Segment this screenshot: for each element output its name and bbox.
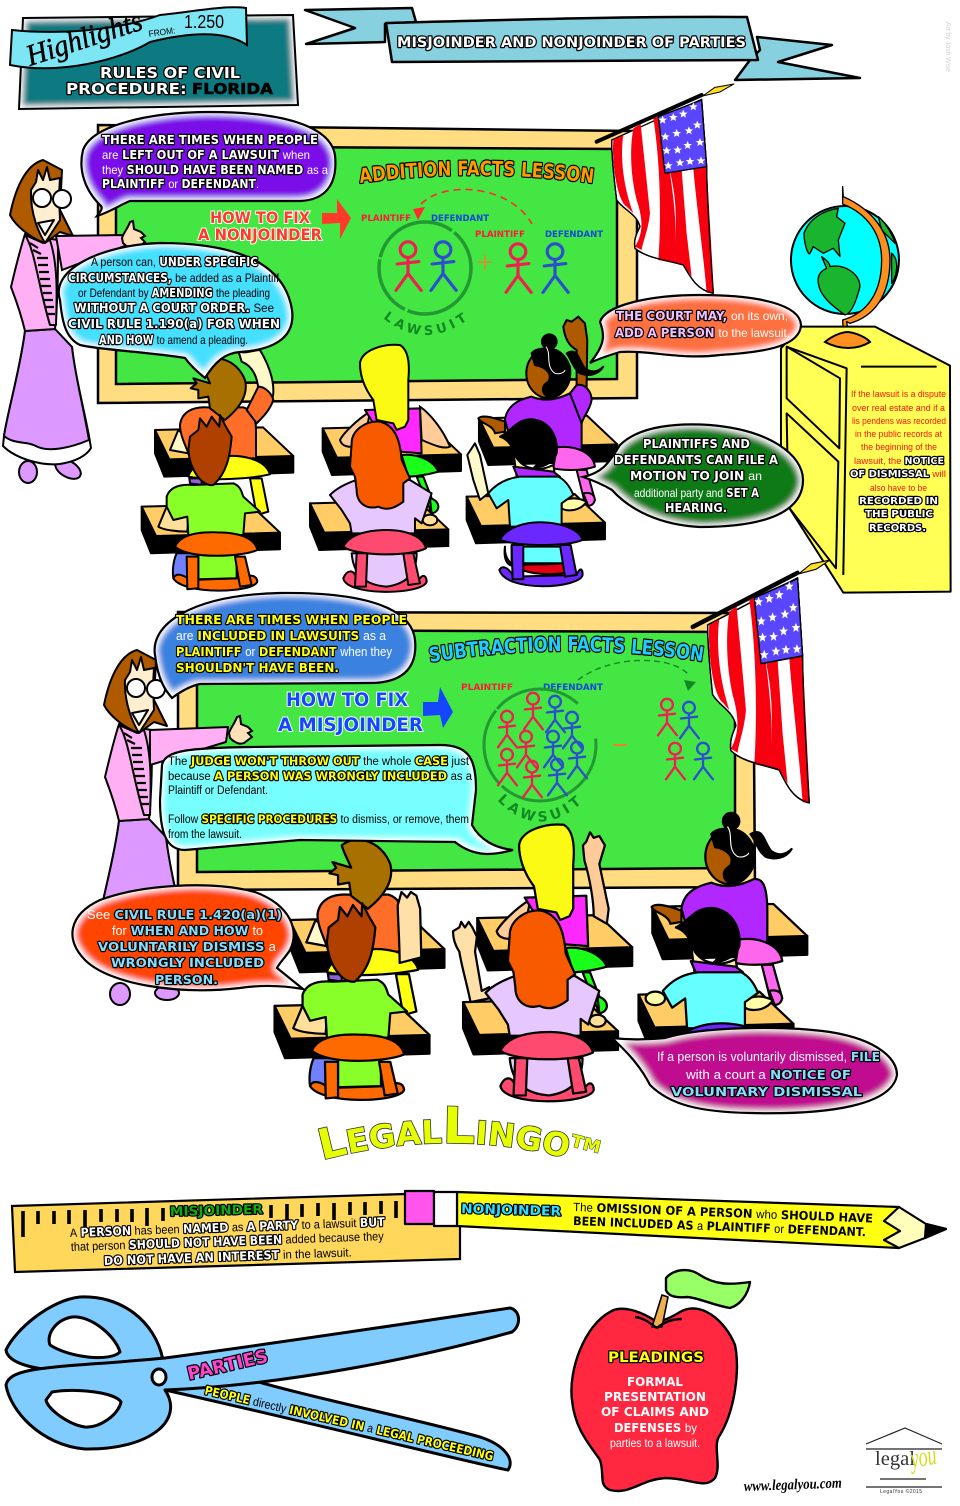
plaintiff defendant addition diagram: PLAINTIFF xyxy=(361,214,411,224)
classroom board: subtraction lesson xyxy=(176,610,756,891)
highlights script: Highlights xyxy=(21,4,146,73)
callout: how to add a person by amending: CIRCUMSTANCES, be added as a Plaintiff xyxy=(68,271,280,285)
classroom board: addition lesson xyxy=(96,124,638,404)
plaintiff defendant addition diagram: DEFENDANT xyxy=(431,214,490,224)
legalyou logo: legal xyxy=(875,1448,915,1470)
student: red hair xyxy=(310,421,448,592)
plaintiff defendant addition diagram xyxy=(361,188,604,336)
legal lingo logo: TM xyxy=(569,1131,603,1158)
callout: people wrongly included xyxy=(155,593,415,698)
callout: notice of voluntary dismissal: with a court a NOTICE OF xyxy=(685,1067,851,1082)
callout: judge won't throw out the case: from the lawsuit. xyxy=(168,829,242,841)
cabinet note text: lawsuit, the NOTICE xyxy=(854,456,944,467)
student: red hair, raised hand xyxy=(453,910,618,1101)
plaintiff defendant addition diagram: PLAINTIFF xyxy=(475,230,525,240)
callout: people wrongly included: are INCLUDED IN LAWSUITS as a xyxy=(176,628,386,643)
callout: judge won't throw out the case: The JUDGE WON'T THROW OUT the whole CASE just xyxy=(168,754,470,768)
callout: civil rule 1.420: PERSON. xyxy=(155,972,218,987)
apple: pleadings definition xyxy=(571,1270,750,1491)
plaintiff defendant subtraction diagram: LAWSUIT xyxy=(498,794,579,822)
cabinet note text: the beginning of the xyxy=(861,442,937,453)
student: purple shirt, raised hand xyxy=(478,317,617,506)
main title banner xyxy=(305,8,860,80)
student: orange shirt, raised hand xyxy=(289,840,444,1015)
arrow: red xyxy=(322,199,351,239)
student: cyan shirt xyxy=(639,908,793,1095)
scissors text: PEOPLE directly INVOLVED IN a LEGAL PROCEEDING xyxy=(203,1383,495,1464)
scissors: parties definition xyxy=(6,1297,519,1470)
scissors heading: PARTIES xyxy=(185,1346,270,1385)
callout: how to add a person by amending: WITHOUT A COURT ORDER. See xyxy=(74,301,274,315)
heading line 2: PROCEDURE: FLORIDA xyxy=(66,80,273,98)
teacher: second classroom xyxy=(97,650,252,1005)
yellow cabinet with lis pendens note xyxy=(781,327,951,593)
pencil heading: NONJOINDER xyxy=(461,1202,561,1220)
callout: motion to join: MOTION TO JOIN an xyxy=(630,469,762,483)
ruler text xyxy=(70,1215,386,1268)
legal lingo logo: LEGALLINGO xyxy=(318,1106,570,1160)
callout: court may add a person: ADD A PERSON to the lawsuit. xyxy=(615,326,790,340)
callout: people left out of a lawsuit: THERE ARE TIMES WHEN PEOPLE xyxy=(102,133,318,147)
globe base xyxy=(825,332,870,348)
legalyou logo: you xyxy=(906,1440,939,1475)
pencil: nonjoinder definition xyxy=(405,1191,946,1248)
legal lingo logo xyxy=(318,1106,603,1160)
student: green shirt xyxy=(275,903,429,1100)
plaintiff defendant addition diagram: LAWSUIT xyxy=(384,311,465,336)
callout: court may add a person xyxy=(590,295,801,363)
callout: people wrongly included: THERE ARE TIMES WHEN PEOPLE xyxy=(176,612,407,627)
apple text: OF CLAIMS AND xyxy=(601,1405,709,1419)
student: green shirt xyxy=(142,415,280,591)
classroom board: subtraction lesson: SUBTRACTION FACTS LESSON xyxy=(428,635,704,663)
cabinet note text: THE PUBLIC xyxy=(865,509,933,520)
callout: motion to join: PLAINTIFFS AND xyxy=(643,437,750,451)
plaintiff defendant subtraction diagram: DEFENDANT xyxy=(543,683,604,693)
callout: how to add a person by amending: AND HOW to amend a pleading. xyxy=(99,333,248,347)
callout: court may add a person: THE COURT MAY, on its own, xyxy=(616,309,788,323)
callout: people left out of a lawsuit: they SHOULD HAVE BEEN NAMED as a xyxy=(102,163,328,177)
callout: people wrongly included: SHOULDN'T HAVE BEEN. xyxy=(176,660,339,675)
callout: judge won't throw out the case: Plaintiff or Defendant. xyxy=(168,785,268,797)
apple text: parties to a lawsuit. xyxy=(610,1436,700,1450)
callout: civil rule 1.420: WRONGLY INCLUDED xyxy=(111,955,264,970)
callout: motion to join: HEARING. xyxy=(665,501,727,515)
ruler text: DO NOT HAVE AN INTEREST in the lawsuit. xyxy=(104,1245,352,1268)
apple text: FORMAL xyxy=(627,1375,683,1389)
students: second classroom xyxy=(275,813,807,1101)
board heading: subtraction facts lesson xyxy=(430,651,707,662)
cabinet note text: OF DISMISSAL will xyxy=(850,469,946,480)
cabinet note text: RECORDED IN xyxy=(859,496,938,507)
callout: notice of voluntary dismissal: VOLUNTARY DISMISSAL xyxy=(671,1084,862,1099)
ruler text: A PERSON has been NAMED as A PARTY to a lawsuit BUT xyxy=(70,1215,386,1240)
banner text: MISJOINDER AND NONJOINDER OF PARTIES xyxy=(397,35,746,51)
student: blonde hair, raised hand xyxy=(477,825,632,1013)
rule number: 1.250 xyxy=(184,12,224,32)
callout: people left out of a lawsuit xyxy=(81,112,335,216)
callout: people left out of a lawsuit: are LEFT OUT OF A LAWSUIT when xyxy=(102,148,310,162)
apple text: DEFENSES by xyxy=(614,1421,697,1435)
how to fix a misjoinder xyxy=(278,689,423,736)
pencil text xyxy=(573,1200,873,1239)
student: orange shirt, raised paper xyxy=(155,350,293,515)
from label: FROM: xyxy=(148,25,176,39)
callout: notice of voluntary dismissal: If a person is voluntarily dismissed, FILE xyxy=(657,1049,880,1064)
plaintiff defendant subtraction diagram: PLAINTIFF xyxy=(461,683,513,693)
art credit: Art by Josh Wise xyxy=(944,22,951,72)
callout: notice of voluntary dismissal xyxy=(612,1028,897,1113)
how to fix a nonjoinder: HOW TO FIX xyxy=(210,208,311,227)
plaintiff defendant subtraction diagram xyxy=(461,660,714,822)
cabinet note text: in the public records at xyxy=(855,429,942,440)
apple heading: PLEADINGS xyxy=(608,1350,704,1366)
cabinet note text: also have to be xyxy=(870,483,927,494)
arrow: blue xyxy=(423,687,453,728)
callout: civil rule 1.420: See CIVIL RULE 1.420(a)(1) xyxy=(87,907,282,922)
callout: civil rule 1.420: VOLUNTARILY DISMISS a xyxy=(98,939,276,954)
cabinet note text: lis pendens was recorded xyxy=(852,416,946,427)
callout: people wrongly included: PLAINTIFF or DEFENDANT when they xyxy=(176,644,393,659)
board heading: addition facts lesson: ADDITION FACTS LESSON xyxy=(359,159,595,184)
title panel: rules of civil procedure xyxy=(10,4,298,109)
cabinet note text: RECORDS. xyxy=(869,523,926,534)
how to fix a nonjoinder: A NONJOINDER xyxy=(198,225,322,244)
student: cyan shirt, raised paper xyxy=(467,419,605,586)
cabinet note text xyxy=(850,389,946,534)
students: first classroom xyxy=(142,317,617,592)
callout: motion to join xyxy=(583,424,803,527)
callout: motion to join: additional party and SET A xyxy=(634,486,760,500)
plaintiff defendant addition diagram: DEFENDANT xyxy=(545,230,604,240)
flag: first classroom xyxy=(597,84,734,293)
ruler heading: MISJOINDER xyxy=(170,1203,263,1220)
callout: how to add a person by amending: A person can, UNDER SPECIFIC xyxy=(91,255,258,269)
callout: how to add a person by amending: or Defendant by AMENDING the pleading xyxy=(78,286,270,300)
cabinet note text: If the lawsuit is a dispute xyxy=(851,389,946,400)
callout: motion to join: DEFENDANTS CAN FILE A xyxy=(614,453,779,467)
callout: judge won't throw out the case: Follow SPECIFIC PROCEDURES to dismiss, or remove, them xyxy=(168,812,469,826)
how to fix a nonjoinder xyxy=(198,208,322,244)
how to fix a misjoinder: HOW TO FIX xyxy=(286,689,408,711)
legalyou logo xyxy=(866,1428,942,1495)
apple text xyxy=(601,1375,709,1450)
student: purple shirt xyxy=(652,813,807,1005)
legalyou logo: LegalYou ©2015 xyxy=(880,1488,922,1495)
website url: www.legalyou.com xyxy=(744,1476,842,1495)
ribbon: highlights xyxy=(10,7,247,68)
heading line 1: RULES OF CIVIL xyxy=(100,64,240,82)
flag: second classroom xyxy=(693,560,830,803)
callout: judge won't throw out the case xyxy=(160,745,513,854)
ruler: misjoinder definition xyxy=(12,1194,460,1272)
callout: civil rule 1.420 xyxy=(72,885,303,990)
globe xyxy=(791,187,899,333)
how to fix a misjoinder: A MISJOINDER xyxy=(278,714,423,736)
pencil text: The OMISSION OF A PERSON who SHOULD HAVE xyxy=(573,1200,873,1226)
ruler text: that person SHOULD NOT HAVE BEEN added because they xyxy=(71,1229,384,1254)
student: blonde hair xyxy=(323,345,461,513)
callout: how to add a person by amending: CIVIL RULE 1.190(a) FOR WHEN xyxy=(68,317,280,331)
teacher: first classroom xyxy=(3,160,145,483)
apple text: PRESENTATION xyxy=(604,1390,706,1404)
cabinet note text: over real estate and if a xyxy=(852,403,946,414)
pencil text: BEEN INCLUDED AS a PLAINTIFF or DEFENDANT. xyxy=(573,1214,866,1239)
callout: judge won't throw out the case: because A PERSON WAS WRONGLY INCLUDED as a xyxy=(168,769,473,783)
callout: civil rule 1.420: for WHEN AND HOW to xyxy=(112,923,263,938)
callout: people left out of a lawsuit: PLAINTIFF or DEFENDANT. xyxy=(102,177,259,191)
callout: how to add a person by amending xyxy=(59,243,292,378)
